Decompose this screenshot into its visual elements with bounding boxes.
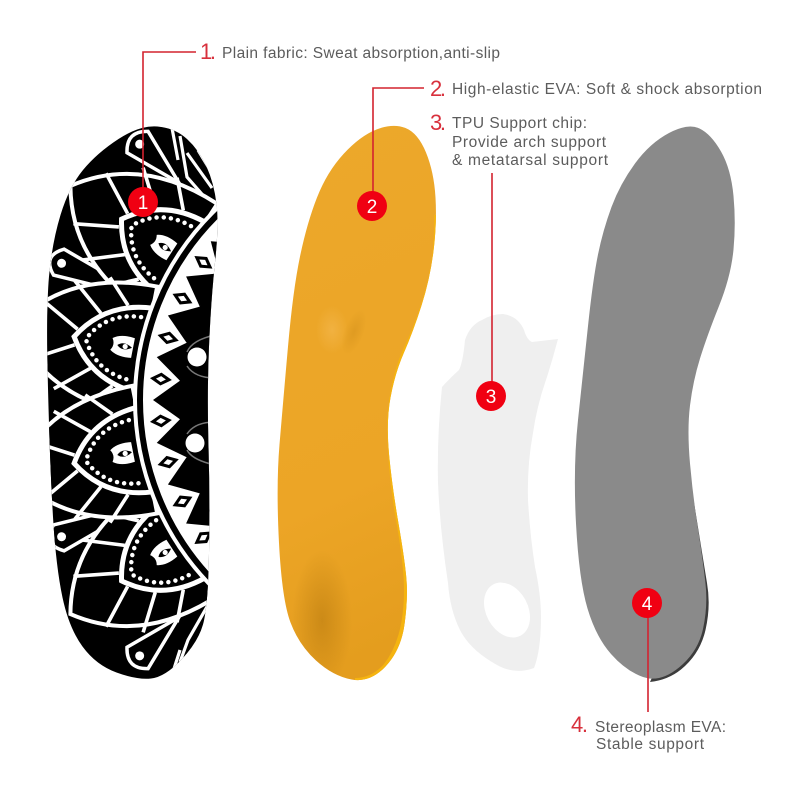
callout 3: TPU support chip: & metatarsal support (452, 152, 609, 169)
callout 3: TPU support chip: TPU Support chip: (452, 115, 587, 132)
callout 2: high-elastic EVA: 2. (430, 76, 446, 101)
callout 3: TPU support chip (430, 110, 609, 411)
callout 1: plain fabric (128, 39, 500, 217)
callout 1: plain fabric: Plain fabric: Sweat absorption,anti-slip (222, 45, 500, 62)
callout 3: TPU support chip: Provide arch support (452, 134, 607, 151)
callout 3: TPU support chip: 3. (430, 110, 446, 135)
callout 2: high-elastic EVA: 2 (367, 197, 377, 218)
callout 4: stereoplasm EVA (571, 588, 726, 753)
callout 3: TPU support chip: 3 (486, 387, 496, 408)
callout 1: plain fabric: 1. (200, 39, 216, 64)
callout 2: high-elastic EVA (357, 76, 762, 221)
insole: white TPU support chip (438, 314, 558, 671)
insole: patterned plain fabric layer (47, 126, 218, 679)
insole: orange high-elastic EVA layer (278, 126, 436, 680)
infographic: insole layers (47, 44, 761, 752)
callout 4: stereoplasm EVA: Stable support (596, 736, 705, 753)
chip heel hole (475, 575, 539, 645)
callout 1: plain fabric: 1 (138, 193, 148, 214)
insole: grey stereoplasm EVA layer (575, 127, 735, 682)
callout 4: stereoplasm EVA: 4. (571, 712, 588, 737)
callout 4: stereoplasm EVA: Stereoplasm EVA: (595, 719, 726, 736)
callout 2: high-elastic EVA: High-elastic EVA: Soft & shock absorption (452, 81, 762, 98)
callout 4: stereoplasm EVA: 4 (642, 594, 653, 615)
